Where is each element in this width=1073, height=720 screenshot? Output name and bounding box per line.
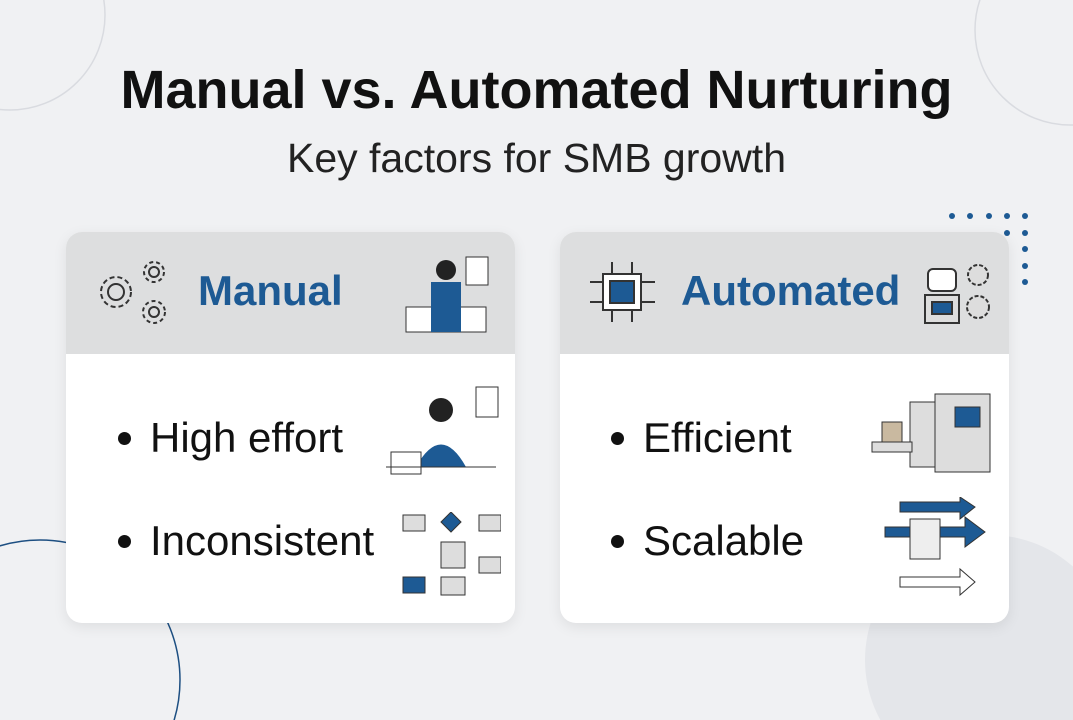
item: inconsistent: Inconsistent [150, 517, 374, 564]
panel: automated [560, 232, 1009, 623]
heading: manual: Manual [198, 267, 343, 314]
subtitle: Key factors for SMB growth [287, 135, 786, 181]
icon: chip [590, 262, 655, 322]
icon: machine [872, 394, 990, 472]
item: high effort: High effort [150, 414, 343, 461]
heading: automated: Automated [681, 267, 900, 314]
item: scalable: Scalable [643, 517, 804, 564]
icon: gears [100, 261, 166, 324]
icon: woman with papers [406, 256, 488, 332]
title: Manual vs. Automated Nurturing [120, 60, 953, 120]
icon: flowchart [402, 512, 501, 596]
icon: robot [924, 264, 990, 324]
icon: man at desk [386, 386, 498, 474]
dot grid decoration [949, 213, 1028, 285]
panel: manual [66, 232, 515, 623]
item: efficient: Efficient [643, 414, 792, 461]
icon: arrows [884, 497, 986, 596]
